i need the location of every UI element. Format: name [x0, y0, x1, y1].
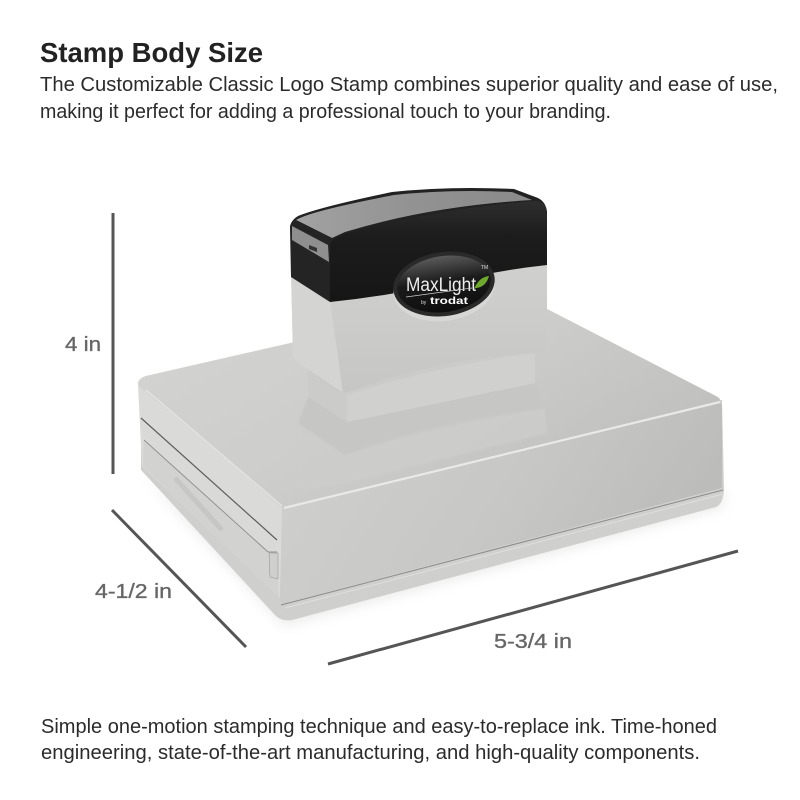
- footer text: engineering, state-of-the-art manufacturing, and high-quality components.: [41, 741, 700, 764]
- footer text: Simple one-motion stamping technique and easy-to-replace ink. Time-honed: [41, 715, 717, 738]
- dimension: width: 5-3/4 in: [494, 630, 572, 653]
- leaf: [474, 276, 489, 289]
- stamp reflection under block: [298, 383, 545, 455]
- base top reflection of stamp: [298, 408, 547, 490]
- intro text: [40, 73, 778, 123]
- intro text: The Customizable Classic Logo Stamp combines superior quality and ease of use,: [40, 73, 778, 96]
- intro text: making it perfect for adding a professional touch to your branding.: [40, 100, 611, 123]
- maxlight badge: by: [421, 300, 427, 306]
- dimension: width: [328, 551, 738, 664]
- maxlight badge: TM: [481, 265, 488, 271]
- base drawer upper plate: [142, 418, 277, 552]
- stamp grey cap top: [296, 191, 532, 238]
- base drawer slot line: [141, 418, 277, 540]
- stamp window label: [292, 226, 329, 262]
- maxlight badge: trodat: [430, 296, 469, 307]
- maxlight badge: [389, 245, 499, 328]
- stamp inner block: [308, 345, 535, 422]
- dimension: height: 4 in: [65, 333, 101, 356]
- base top surface: [138, 295, 720, 506]
- title: Stamp Body Size: [40, 37, 263, 68]
- base lower lip: [141, 385, 724, 620]
- base front lip line: [281, 490, 723, 605]
- base left face: [138, 382, 282, 598]
- dimension: depth: [95, 510, 246, 647]
- stamp black front: [330, 201, 547, 302]
- base shadow: [145, 478, 726, 626]
- dimension: depth: 4-1/2 in: [95, 580, 172, 603]
- stamp grey body: [291, 262, 547, 393]
- footer text: [41, 715, 717, 764]
- maxlight badge: MaxLight: [406, 275, 477, 296]
- base front face: [280, 402, 722, 603]
- base embossed mark: [175, 478, 222, 530]
- product photo: stamp on base: [138, 188, 726, 626]
- stamp left face shading: [291, 270, 343, 393]
- base drawer lower plate: [143, 441, 279, 598]
- stamp cap rim: [290, 188, 547, 250]
- base front edge highlight: [284, 402, 720, 508]
- stamp black left face: [290, 220, 332, 302]
